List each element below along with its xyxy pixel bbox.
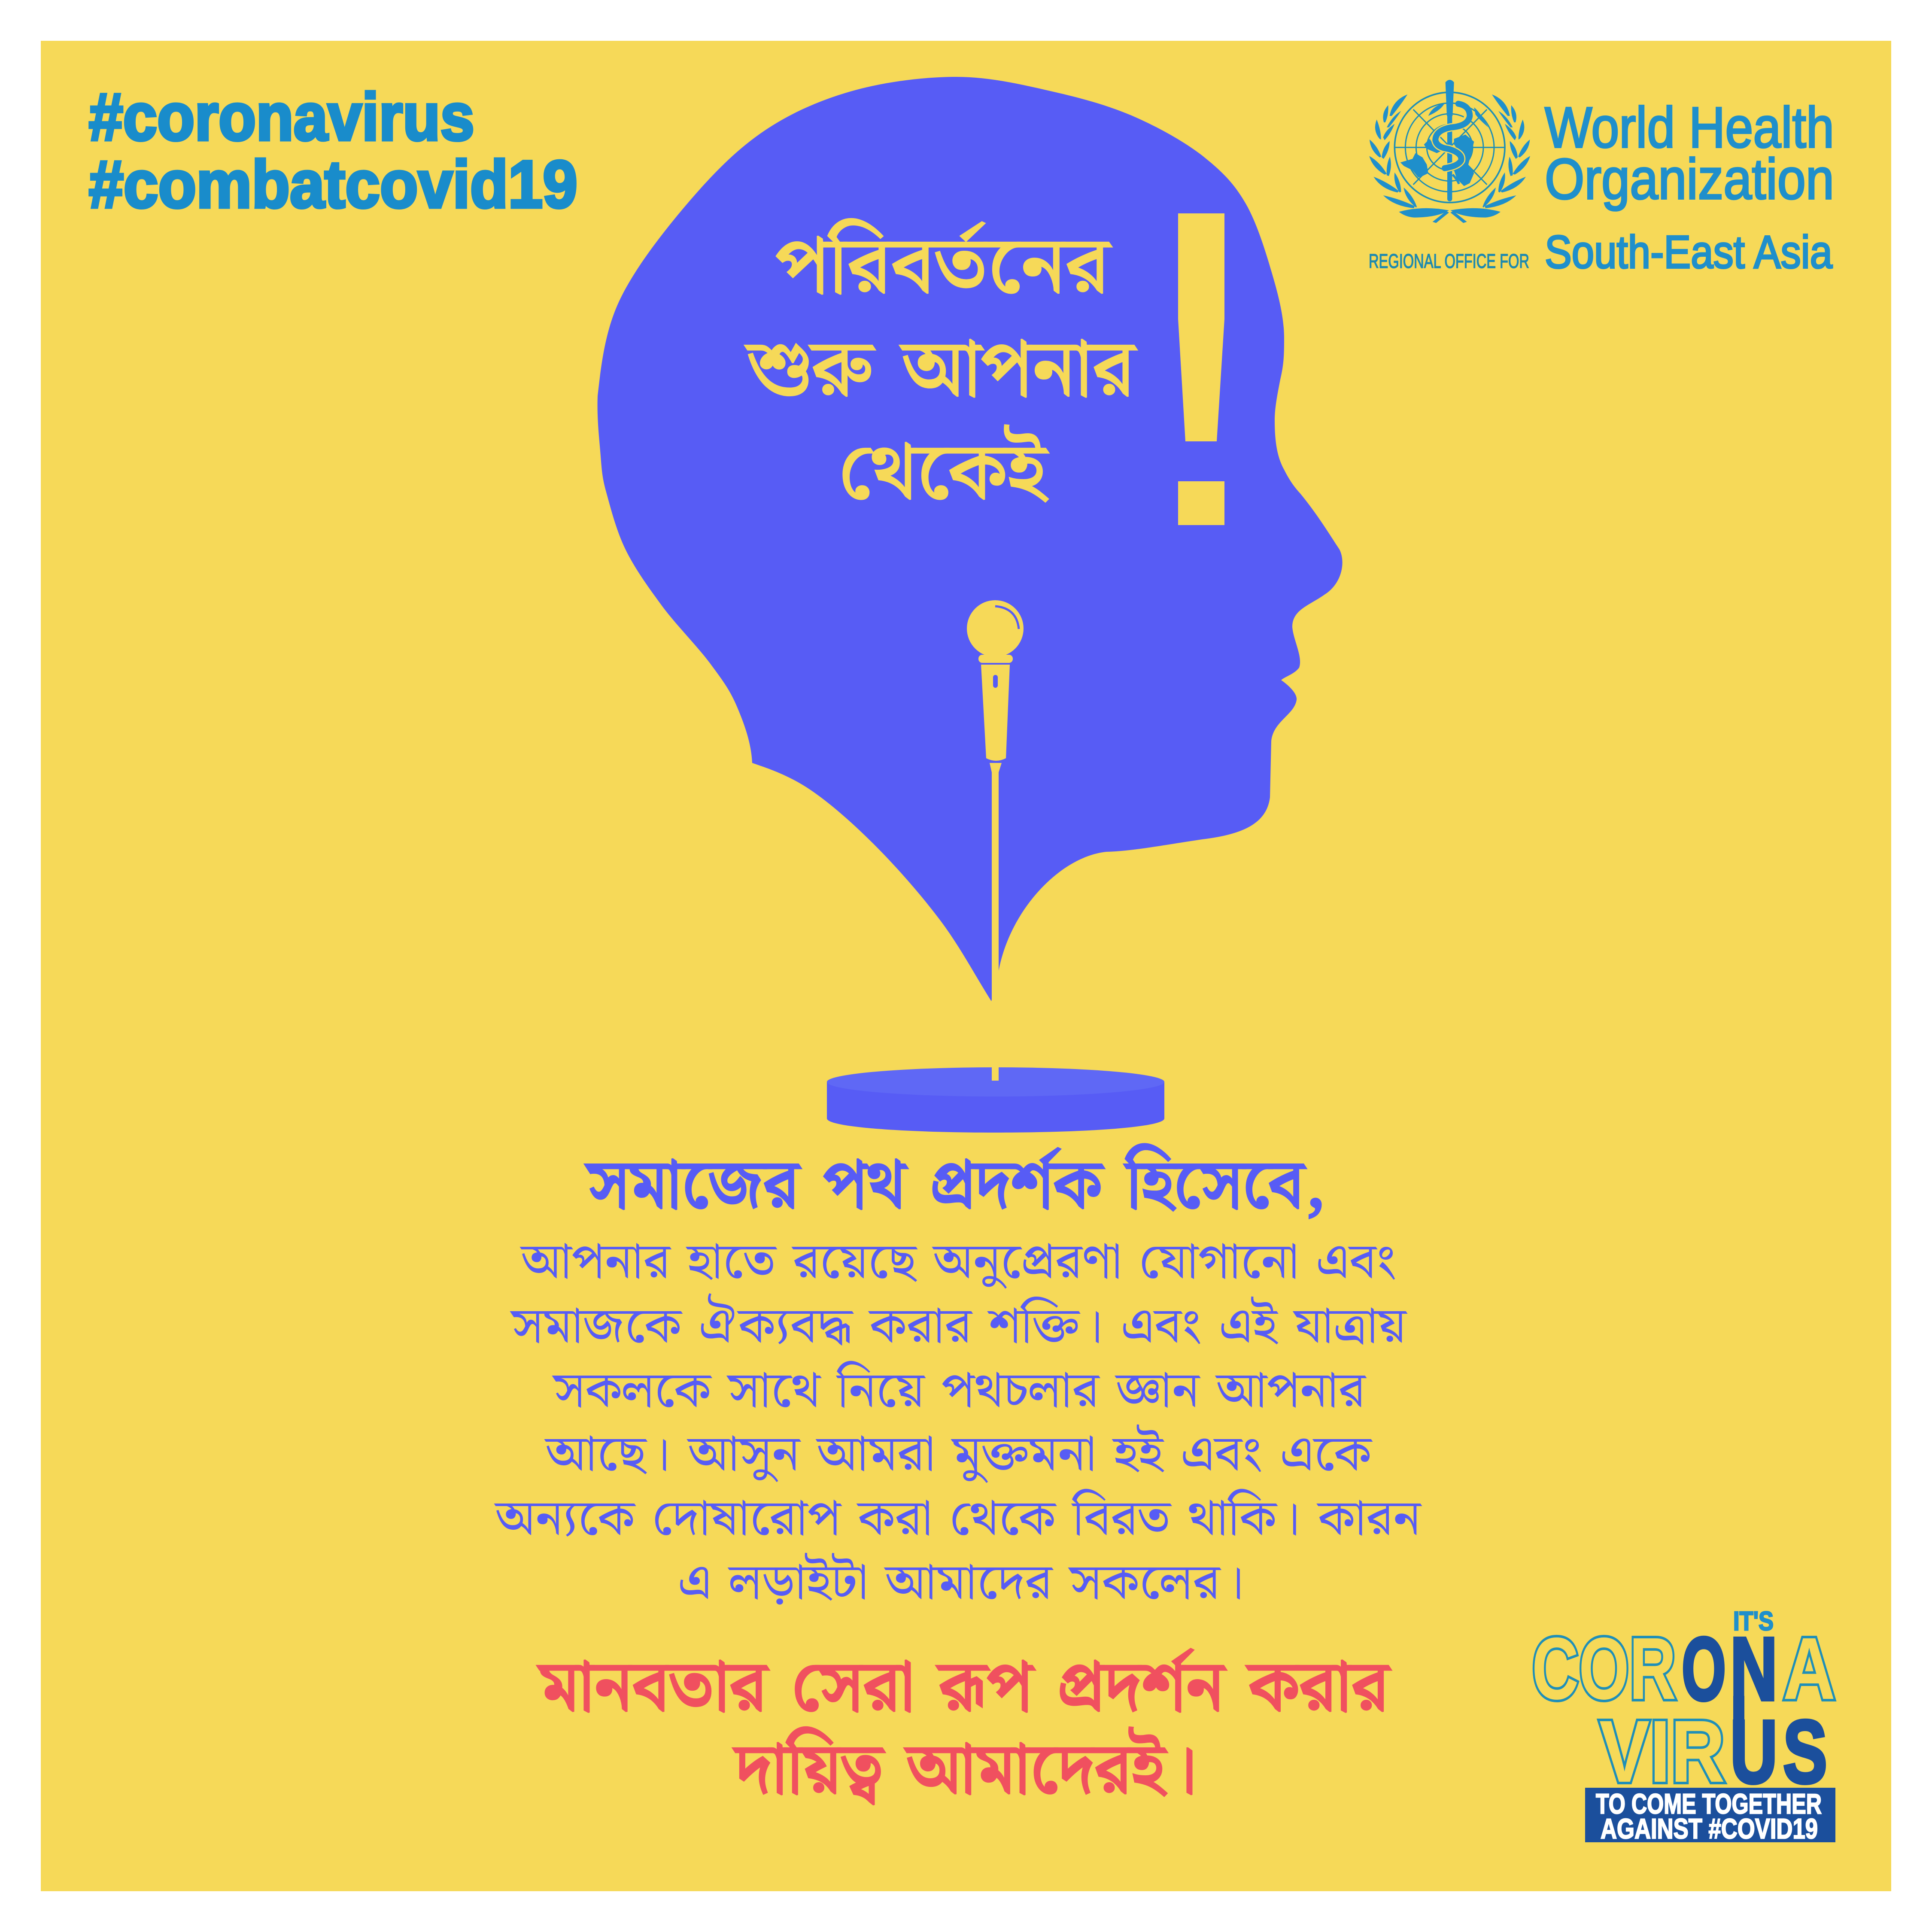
body paragraph: আছে। আসুন আমরা মুক্তমনা হই এবং একে xyxy=(544,1416,1373,1495)
It's Corona Virus logo: O xyxy=(1682,1619,1726,1719)
body paragraph: অন্যকে দোষারোপ করা থেকে বিরত থাকি। কারন xyxy=(494,1480,1422,1560)
microphone stand base xyxy=(827,1066,1164,1133)
hashtags: #combatcovid19 xyxy=(89,147,577,222)
hashtags: #coronavirus xyxy=(89,80,474,155)
It's Corona Virus logo: IT'S xyxy=(1733,1607,1774,1636)
icon: microphone xyxy=(967,600,1024,1000)
wreath xyxy=(1369,94,1449,223)
It's Corona Virus logo: A xyxy=(1783,1619,1835,1718)
headline inside head: থেকেই xyxy=(838,411,1048,538)
closing message xyxy=(538,1633,1391,1828)
It's Corona Virus logo: COR xyxy=(1532,1619,1676,1718)
It's Corona Virus logo: N xyxy=(1730,1619,1777,1719)
closing message: মানবতার সেরা রূপ প্রদর্শন করার xyxy=(538,1633,1391,1746)
headline inside head: পরিবর্তনের xyxy=(775,205,1112,332)
headline inside head xyxy=(745,205,1137,538)
closing message: দায়িত্ব আমাদেরই। xyxy=(733,1715,1198,1828)
subheading: সমাজের পথ প্রদর্শক হিসেবে, xyxy=(585,1133,1325,1242)
WHO logo xyxy=(1369,80,1834,278)
exclamation mark xyxy=(1178,213,1224,525)
body paragraph: সমাজকে ঐক্যবদ্ধ করার শক্তি। এবং এই যাত্রায় xyxy=(510,1288,1408,1367)
It's Corona Virus logo xyxy=(1532,1607,1835,1844)
It's Corona Virus logo: VIR xyxy=(1599,1702,1725,1801)
icon: WHO emblem xyxy=(1369,80,1530,223)
continents xyxy=(1400,153,1428,177)
hashtags xyxy=(89,80,577,222)
head silhouette xyxy=(598,77,1343,1001)
WHO wordmark: REGIONAL OFFICE FOR xyxy=(1369,250,1529,272)
staff xyxy=(1443,82,1457,199)
globe lines xyxy=(1394,92,1505,203)
body paragraph xyxy=(494,1224,1422,1624)
headline inside head: শুরু আপনার xyxy=(745,308,1137,435)
body paragraph: আপনার হাতে রয়েছে অনুপ্রেরণা যোগানো এবং xyxy=(519,1224,1396,1303)
It's Corona Virus logo: U xyxy=(1730,1702,1777,1802)
WHO wordmark: Organization xyxy=(1545,147,1834,211)
WHO wordmark xyxy=(1369,96,1834,278)
It's Corona Virus logo: S xyxy=(1783,1702,1827,1802)
WHO wordmark: South-East Asia xyxy=(1545,226,1833,278)
body paragraph: এ লড়াইটা আমাদের সকলের। xyxy=(677,1544,1245,1624)
It's Corona Virus logo: AGAINST #COVID19 xyxy=(1601,1813,1818,1844)
It's Corona Virus logo: TO COME TOGETHER xyxy=(1596,1788,1822,1820)
serpent xyxy=(1435,115,1468,168)
WHO wordmark: World Health xyxy=(1545,96,1834,160)
body paragraph: সকলকে সাথে নিয়ে পথচলার জ্ঞান আপনার xyxy=(552,1352,1367,1432)
